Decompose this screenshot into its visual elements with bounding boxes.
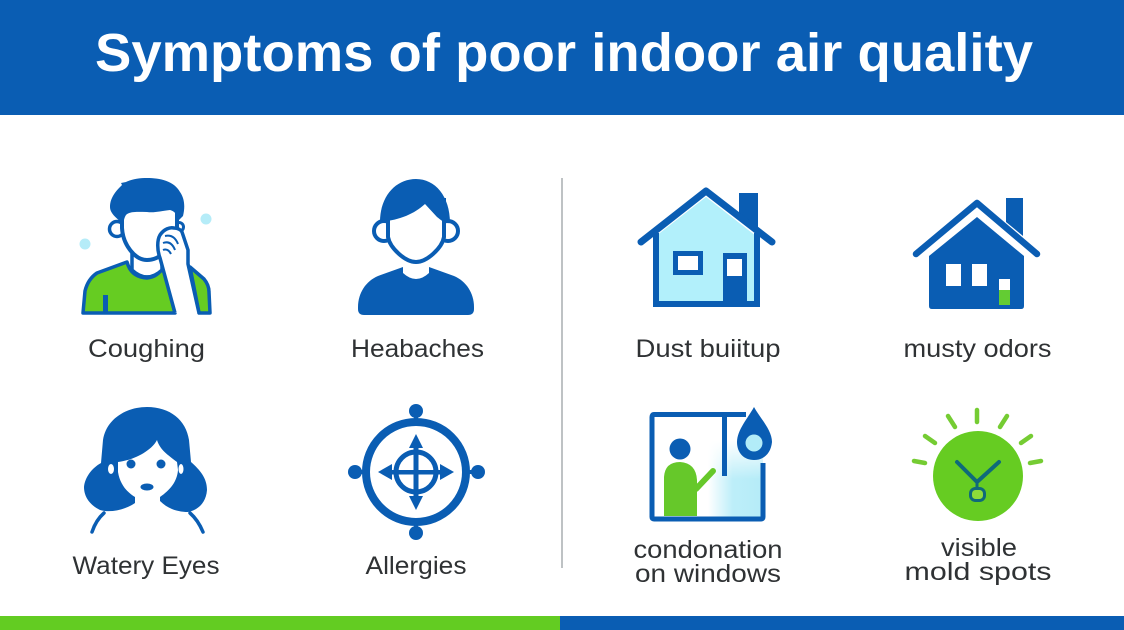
label: Allergies: Allergies [366,552,466,580]
label: Dust buiitup: Dust buiitup [636,335,780,363]
label: Heabaches: Heabaches [351,335,484,363]
label: visible mold spots: visible [941,534,1017,562]
label: musty odors: musty odors [904,335,1052,363]
label: condensation on windows: on windows [635,560,781,588]
title: Symptoms of poor indoor air quality [95,23,1033,83]
label: visible mold spots: mold spots [904,558,1052,586]
label: Watery Eyes: Watery Eyes [72,552,220,580]
label: visible mold spots [904,534,1052,586]
icon: mold spot [914,410,1041,521]
icon: musty odors house [916,198,1037,309]
footer bar [0,616,1124,630]
icon: allergies crosshair [348,404,485,540]
header banner [0,0,1124,115]
icon: dust buildup house [641,191,772,304]
label: condensation on windows [634,536,782,588]
label: Coughing: Coughing [88,335,205,363]
label: condensation on windows: condonation [634,536,782,564]
icon: condensation window [652,407,772,519]
icon: watery eyes woman [84,407,207,532]
icon: coughing person [80,178,212,313]
icon: headache person [358,179,474,315]
